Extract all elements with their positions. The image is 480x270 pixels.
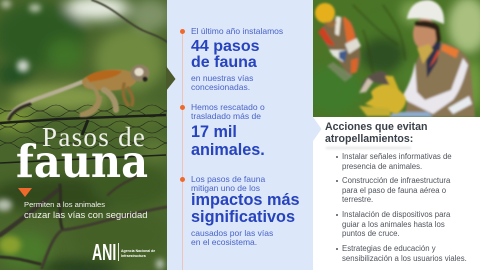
animal and gloves	[359, 71, 406, 116]
heading: actions	[325, 121, 427, 145]
icon: orange triangle	[18, 188, 32, 197]
fence	[0, 105, 176, 149]
list: actions: sensibilización a los usuarios viales.	[342, 254, 467, 263]
fact: 17 mil animales: animales.	[191, 141, 265, 159]
fact: impactos más significativos: causados por las vías	[191, 228, 273, 238]
fact: 17 mil animales: Hemos rescatado o	[191, 102, 265, 112]
fact: 44 pasos de fauna: El último año instalamos	[191, 26, 283, 36]
panel: workers photo	[313, 0, 480, 117]
logo: ANI: Agencia Nacional de	[121, 249, 155, 253]
fact: impactos más significativos: mitigan uno de los	[191, 182, 260, 192]
fact: 44 pasos de fauna: concesionadas.	[191, 82, 250, 92]
icon: monkey	[9, 64, 150, 119]
icon: panel notch arrow	[166, 66, 176, 90]
icon: arrow into actions panel	[313, 117, 322, 141]
logo: ANI: Infraestructura	[121, 254, 146, 258]
list: actions: Instalación de dispositivos para	[342, 210, 450, 219]
fact: 44 pasos de fauna	[180, 26, 283, 92]
fact: 17 mil animales: 17 mil	[191, 123, 237, 141]
list: actions: Construcción de infraestructura	[342, 176, 450, 185]
subtitle: Permiten a los animales	[24, 200, 105, 209]
fact: 44 pasos de fauna: 44 pasos	[191, 38, 259, 55]
fact: 17 mil animales: trasladado más de	[191, 111, 261, 121]
fact: impactos más significativos: en el ecosistema.	[191, 237, 257, 247]
title: fauna	[16, 135, 148, 188]
branches	[0, 0, 167, 268]
panel: key facts	[167, 0, 313, 270]
timeline line	[182, 31, 183, 270]
logo: ANI	[92, 239, 156, 265]
subtitle	[24, 200, 148, 221]
panel: monkey photo with title	[0, 0, 167, 270]
subtitle: cruzar las vías con seguridad	[24, 210, 148, 221]
fact: impactos más significativos: significativos	[191, 208, 295, 226]
fact: 17 mil animales	[180, 102, 265, 159]
heading: actions: Acciones que evitan	[325, 121, 427, 133]
fact: 44 pasos de fauna: de fauna	[191, 54, 257, 71]
list: actions: presencia de animales.	[342, 162, 422, 171]
list: actions: Estrategias de educación y	[342, 244, 436, 253]
decorative shadow under heading	[326, 147, 411, 149]
list: actions: guiar a los animales hasta los	[342, 220, 445, 229]
list: actions: Instalar señales informativas de	[342, 152, 452, 161]
list: actions: para el paso de fauna aérea o	[342, 186, 446, 195]
fact: impactos más significativos: Los pasos de fauna	[191, 174, 265, 184]
list: actions: puntos de cruce.	[342, 229, 400, 238]
title: Pasos de	[42, 122, 146, 152]
fact: impactos más significativos: impactos más	[191, 191, 300, 209]
woman with white helmet	[389, 0, 475, 117]
heading: actions: atropellamientos:	[325, 133, 413, 145]
worker in yellow helmet	[315, 3, 361, 82]
logo: ANI: ANI	[92, 239, 116, 265]
list: actions	[336, 152, 467, 263]
fact: impactos más significativos	[180, 174, 300, 247]
fact: 44 pasos de fauna: en nuestras vías	[191, 72, 253, 82]
list: actions: terrestre.	[342, 195, 373, 204]
